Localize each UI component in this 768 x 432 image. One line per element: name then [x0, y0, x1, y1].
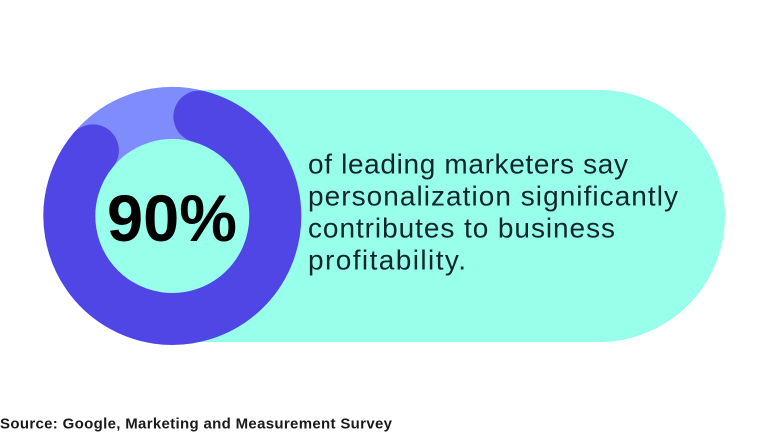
source note: Source: Google, Marketing and Measurement Survey	[0, 416, 393, 432]
text block: statement	[308, 148, 678, 276]
donut progress arc	[69, 117, 275, 319]
big number: 90%	[107, 181, 237, 255]
text block: statement: of leading marketers say	[308, 148, 628, 180]
text block: statement: profitability.	[308, 244, 466, 276]
donut track	[93, 113, 199, 150]
donut centre	[94, 138, 250, 294]
donut chart: 90 percent	[69, 113, 275, 319]
panel: teal pill background	[172, 90, 725, 342]
text block: statement: personalization significantly	[308, 180, 678, 212]
text block: statement: contributes to business	[308, 212, 615, 244]
